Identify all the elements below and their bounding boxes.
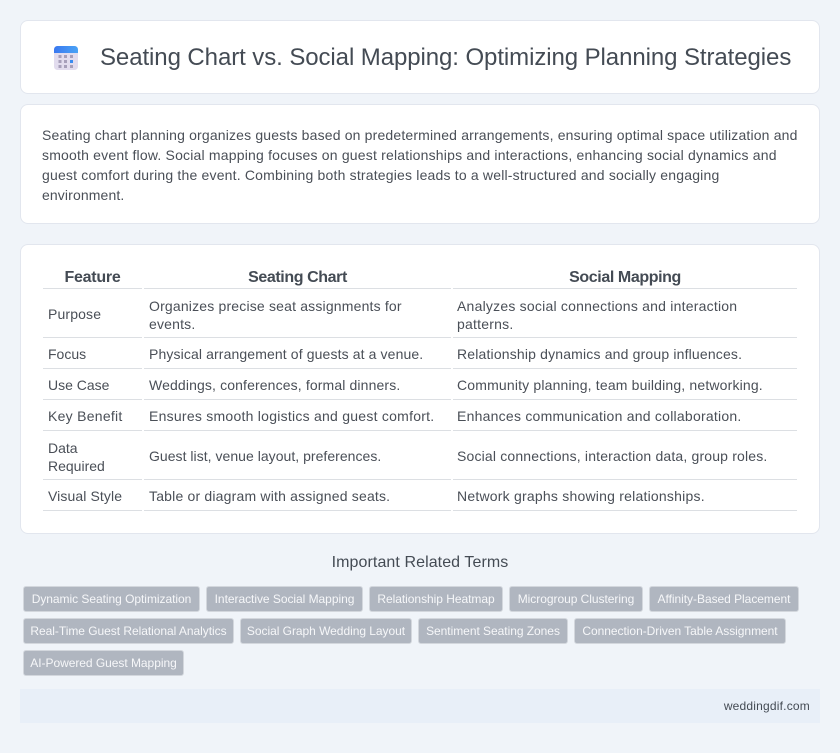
- intro paragraph: [42, 127, 798, 203]
- related terms tags: AI-Powered Guest Mapping: [30, 656, 177, 670]
- row: key benefit: Ensures smooth logistics and guest comfort.: [149, 408, 434, 424]
- row: data required: Data: [48, 440, 78, 456]
- row: use case: [48, 377, 763, 393]
- intro paragraph: smooth event flow. Social mapping focuses on guest relationships and interactions, enhancing social dynamics and: [42, 147, 777, 163]
- row: visual style: Visual Style: [48, 488, 122, 504]
- header card: [20, 20, 820, 94]
- table header row: Seating Chart: [248, 269, 347, 286]
- intro paragraph: environment.: [42, 187, 124, 203]
- related terms tags: Real-Time Guest Relational Analytics: [30, 624, 227, 638]
- row: purpose: patterns.: [457, 316, 513, 332]
- related terms tags: [23, 586, 799, 676]
- related terms tags: Affinity-Based Placement: [658, 592, 790, 606]
- footer site name: weddingdif.com: [724, 699, 810, 713]
- row: focus: Physical arrangement of guests at a venue.: [149, 346, 423, 362]
- related terms tags: Interactive Social Mapping: [215, 592, 354, 606]
- row: purpose: [48, 298, 737, 332]
- comparison table card: [20, 244, 820, 534]
- intro text card: [20, 104, 820, 224]
- row: data required: [48, 440, 767, 474]
- related terms tags: Connection-Driven Table Assignment: [582, 624, 778, 638]
- row: key benefit: Enhances communication and collaboration.: [457, 408, 742, 424]
- intro paragraph: Seating chart planning organizes guests based on predetermined arrangements, ensuring optimal space utilization and: [42, 127, 798, 143]
- title: Seating Chart vs. Social Mapping: Optimizing Planning Strategies: [100, 44, 791, 71]
- row: use case: Weddings, conferences, formal dinners.: [149, 377, 400, 393]
- row: purpose: Purpose: [48, 306, 101, 322]
- row: data required: Social connections, interaction data, group roles.: [457, 448, 767, 464]
- row: purpose: Analyzes social connections and interaction: [457, 298, 737, 314]
- row: visual style: Table or diagram with assigned seats.: [149, 488, 390, 504]
- row: key benefit: Key Benefit: [48, 408, 123, 424]
- intro paragraph: guest comfort during the event. Combining both strategies leads to a well-structured and socially engaging: [42, 167, 719, 183]
- related terms tags: Relationship Heatmap: [377, 592, 495, 606]
- row: purpose: Organizes precise seat assignments for: [149, 298, 402, 314]
- related terms heading: Important Related Terms: [332, 554, 508, 571]
- table header row: Feature: [64, 269, 121, 286]
- row: use case: Use Case: [48, 377, 109, 393]
- row: focus: Relationship dynamics and group influences.: [457, 346, 742, 362]
- row: focus: [48, 346, 742, 362]
- related terms tags: Sentiment Seating Zones: [426, 624, 560, 638]
- related terms tags: Dynamic Seating Optimization: [32, 592, 191, 606]
- table header row: [64, 269, 681, 286]
- row: use case: Community planning, team building, networking.: [457, 377, 763, 393]
- row: visual style: [48, 488, 705, 504]
- row: data required: Required: [48, 458, 105, 474]
- icon: seating calendar: [54, 46, 78, 70]
- row: visual style: Network graphs showing relationships.: [457, 488, 705, 504]
- table header row: Social Mapping: [569, 269, 681, 286]
- row: key benefit: [48, 408, 742, 424]
- related terms tags: Social Graph Wedding Layout: [247, 624, 405, 638]
- row: focus: Focus: [48, 346, 86, 362]
- row: data required: Guest list, venue layout, preferences.: [149, 448, 381, 464]
- related terms tags: Microgroup Clustering: [518, 592, 634, 606]
- footer bar: [20, 689, 820, 723]
- row: purpose: events.: [149, 316, 195, 332]
